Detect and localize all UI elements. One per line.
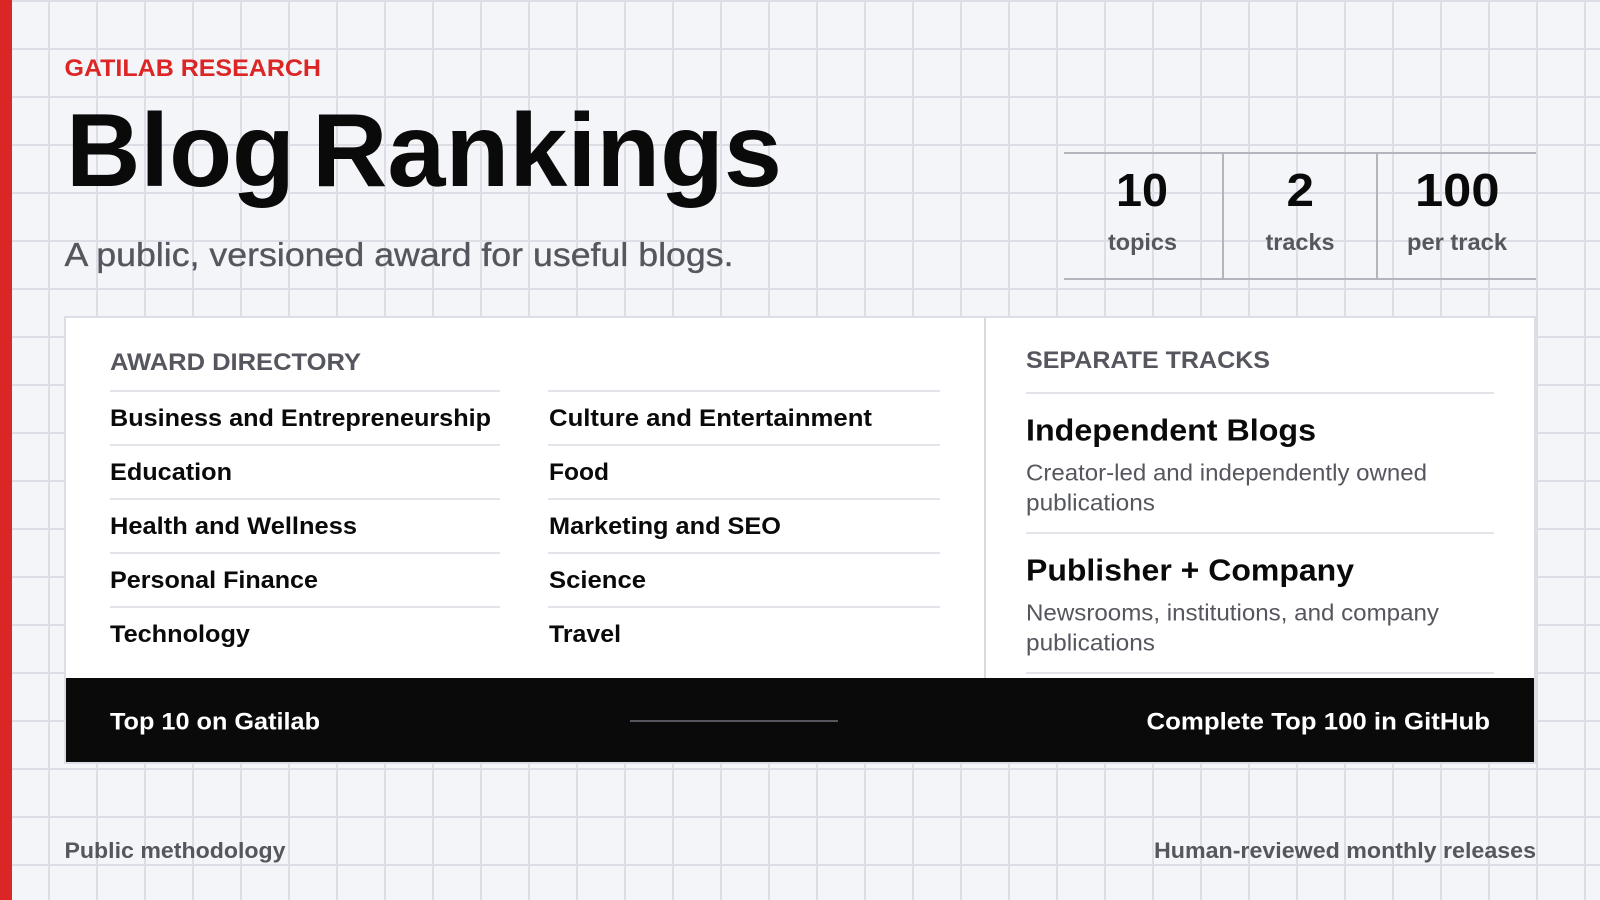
directory column one	[110, 390, 500, 648]
directory column two: Food	[549, 459, 609, 486]
heading: award directory: AWARD DIRECTORY	[110, 349, 361, 376]
stat: tracks	[1266, 164, 1334, 255]
stat: per track: per track	[1407, 229, 1507, 255]
title: Rankings	[312, 93, 782, 209]
subtitle: A public, versioned award for useful blogs.	[64, 236, 733, 273]
stat: tracks: tracks	[1266, 229, 1334, 255]
track: publisher and company: publications	[1026, 630, 1155, 656]
main panel	[65, 317, 1535, 763]
directory column two: Science	[549, 567, 646, 594]
track: publisher and company: Newsrooms, institutions, and company	[1026, 600, 1440, 626]
stat: per track	[1407, 164, 1507, 255]
directory column one: Technology	[110, 621, 250, 648]
directory column two	[548, 390, 940, 648]
panel: award directory	[110, 349, 940, 648]
stats strip	[1064, 152, 1536, 280]
stat: topics: 10	[1116, 164, 1168, 216]
directory column one: Health and Wellness	[110, 513, 357, 540]
directory column two: Marketing and SEO	[549, 513, 781, 540]
eyebrow label: GATILAB RESEARCH	[64, 55, 321, 82]
footer note left: Public methodology	[64, 838, 286, 863]
link: complete top 100 in GitHub: Complete Top 100 in GitHub	[1146, 708, 1490, 736]
title: Blog	[66, 93, 295, 209]
heading: separate tracks: SEPARATE TRACKS	[1026, 347, 1270, 374]
panel: separate tracks	[1026, 347, 1494, 674]
track: independent blogs: Independent Blogs	[1026, 412, 1316, 448]
footer note right: Human-reviewed monthly releases	[1154, 838, 1536, 863]
stat: topics: topics	[1108, 229, 1177, 255]
track: publisher and company: Publisher + Company	[1026, 552, 1355, 588]
link: top 10 on Gatilab: Top 10 on Gatilab	[110, 708, 320, 736]
red edge bar	[0, 0, 12, 900]
stat: topics	[1108, 164, 1177, 255]
track: independent blogs: Creator-led and independently owned	[1026, 460, 1427, 486]
directory column one: Personal Finance	[110, 567, 318, 594]
stat: tracks: 2	[1286, 164, 1314, 216]
track: independent blogs	[1026, 412, 1427, 516]
track: publisher and company	[1026, 552, 1440, 656]
directory column two: Culture and Entertainment	[549, 405, 872, 432]
stat: per track: 100	[1415, 164, 1500, 216]
track: independent blogs: publications	[1026, 490, 1155, 516]
directory column one: Education	[110, 459, 232, 486]
directory column two: Travel	[549, 621, 621, 648]
black footer band	[66, 678, 1534, 762]
directory column one: Business and Entrepreneurship	[110, 405, 491, 432]
